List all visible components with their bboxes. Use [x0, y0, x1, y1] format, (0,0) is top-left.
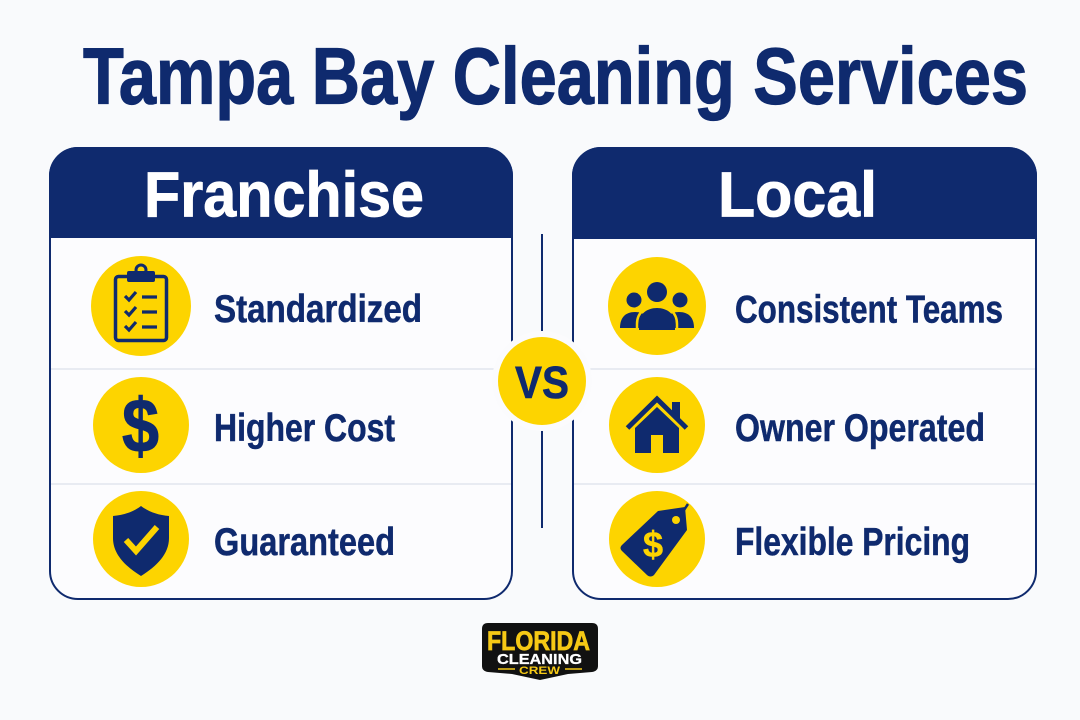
panel header: franchise: [49, 147, 513, 238]
row label: standardized: Standardized: [214, 288, 422, 331]
icon: clipboard checklist: [91, 256, 191, 356]
logo: florida cleaning crew: [482, 623, 598, 680]
icon: team of people: [608, 257, 706, 355]
panel: local: [572, 147, 1037, 599]
row label: owner operated: Owner Operated: [735, 407, 985, 450]
heading: franchise: Franchise: [144, 158, 424, 230]
logo: florida cleaning crew: CREW: [519, 665, 561, 677]
icon: dollar sign: [93, 377, 189, 473]
icon: dollar sign: $: [122, 384, 159, 469]
icon: shield check: [93, 491, 189, 587]
logo: florida cleaning crew: CLEANING: [497, 651, 582, 668]
row label: consistent teams: Consistent Teams: [735, 288, 1003, 332]
panel header: local: [572, 147, 1037, 239]
vs badge: VS: [515, 357, 569, 408]
icon: price tag: $: [643, 524, 663, 565]
icon: price tag: [609, 491, 705, 587]
heading: local: Local: [718, 158, 877, 230]
row label: flexible pricing: Flexible Pricing: [735, 521, 970, 564]
row label: higher cost: Higher Cost: [214, 407, 395, 450]
divider line: [541, 234, 543, 528]
row label: guaranteed: Guaranteed: [214, 521, 395, 564]
vs badge: [492, 331, 592, 431]
panel: franchise: [49, 147, 513, 599]
logo: florida cleaning crew: FLORIDA: [487, 626, 590, 656]
icon: house: [609, 377, 705, 473]
